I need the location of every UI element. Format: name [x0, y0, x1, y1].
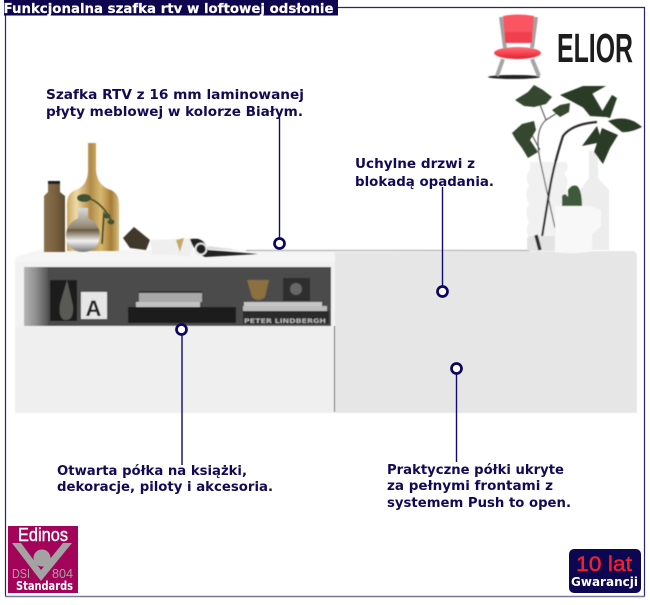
cabinet top — [15, 250, 335, 267]
callout: open shelf: dekoracje, piloty i akcesoria. — [57, 479, 273, 495]
title: Funkcjonalna szafka rtv w loftowej odsłonie — [4, 1, 334, 17]
icon: red chair — [488, 14, 541, 79]
badge: 10 years warranty: Gwarancji — [571, 575, 638, 589]
shelf items: A — [86, 296, 102, 321]
cactus — [562, 186, 582, 206]
white bottle — [580, 151, 609, 250]
magazine — [123, 227, 150, 250]
badge: Edinos standards: Edinos — [18, 525, 68, 545]
callout: laminated board: płyty meblowej w kolorze Białym. — [46, 104, 303, 120]
shelf items — [50, 278, 329, 325]
badge: Edinos standards: 804 — [52, 566, 73, 581]
plant decor — [512, 85, 642, 253]
callout: hidden shelves — [387, 364, 571, 511]
logo: Elior — [488, 14, 633, 79]
callout: tilting doors: Uchylne drzwi z — [355, 156, 475, 172]
leaves — [560, 86, 642, 164]
cabinet left frame — [15, 262, 335, 328]
callout: open shelf — [57, 324, 273, 495]
leaf clusters — [512, 85, 570, 158]
callout: tilting doors — [355, 156, 494, 296]
white jug — [555, 206, 601, 253]
callout: hidden shelves: za pełnymi frontami z — [387, 478, 553, 494]
badge: Edinos standards: Standards — [16, 579, 73, 593]
lower left front — [15, 326, 334, 413]
callout: hidden shelves: systemem Push to open. — [387, 495, 571, 511]
callout: laminated board — [46, 87, 304, 248]
open shelf interior — [24, 267, 331, 326]
cabinet right fronts — [335, 251, 637, 413]
stems — [541, 122, 597, 243]
white ribbed vase — [526, 162, 568, 240]
glass base — [527, 236, 557, 251]
gold vase — [67, 143, 119, 251]
badge: 10 years warranty — [569, 549, 641, 593]
badge: Edinos standards — [8, 525, 78, 593]
callout: open shelf: Otwarta półka na książki, — [57, 463, 247, 479]
decor: vases and magazine — [44, 143, 258, 257]
callout: laminated board: Szafka RTV z 16 mm laminowanej — [46, 87, 304, 103]
callout: tilting doors: blokadą opadania. — [355, 174, 494, 190]
glass sphere — [66, 208, 100, 252]
badge: Edinos standards: DSI — [12, 566, 30, 581]
cabinet — [15, 250, 637, 413]
badge: 10 years warranty: 10 lat — [576, 553, 632, 576]
vase leaves — [82, 197, 112, 244]
brown bottle — [44, 184, 65, 252]
shelf items: PETER LINDBERGH — [244, 317, 326, 325]
callout: hidden shelves: Praktyczne półki ukryte — [387, 462, 564, 478]
